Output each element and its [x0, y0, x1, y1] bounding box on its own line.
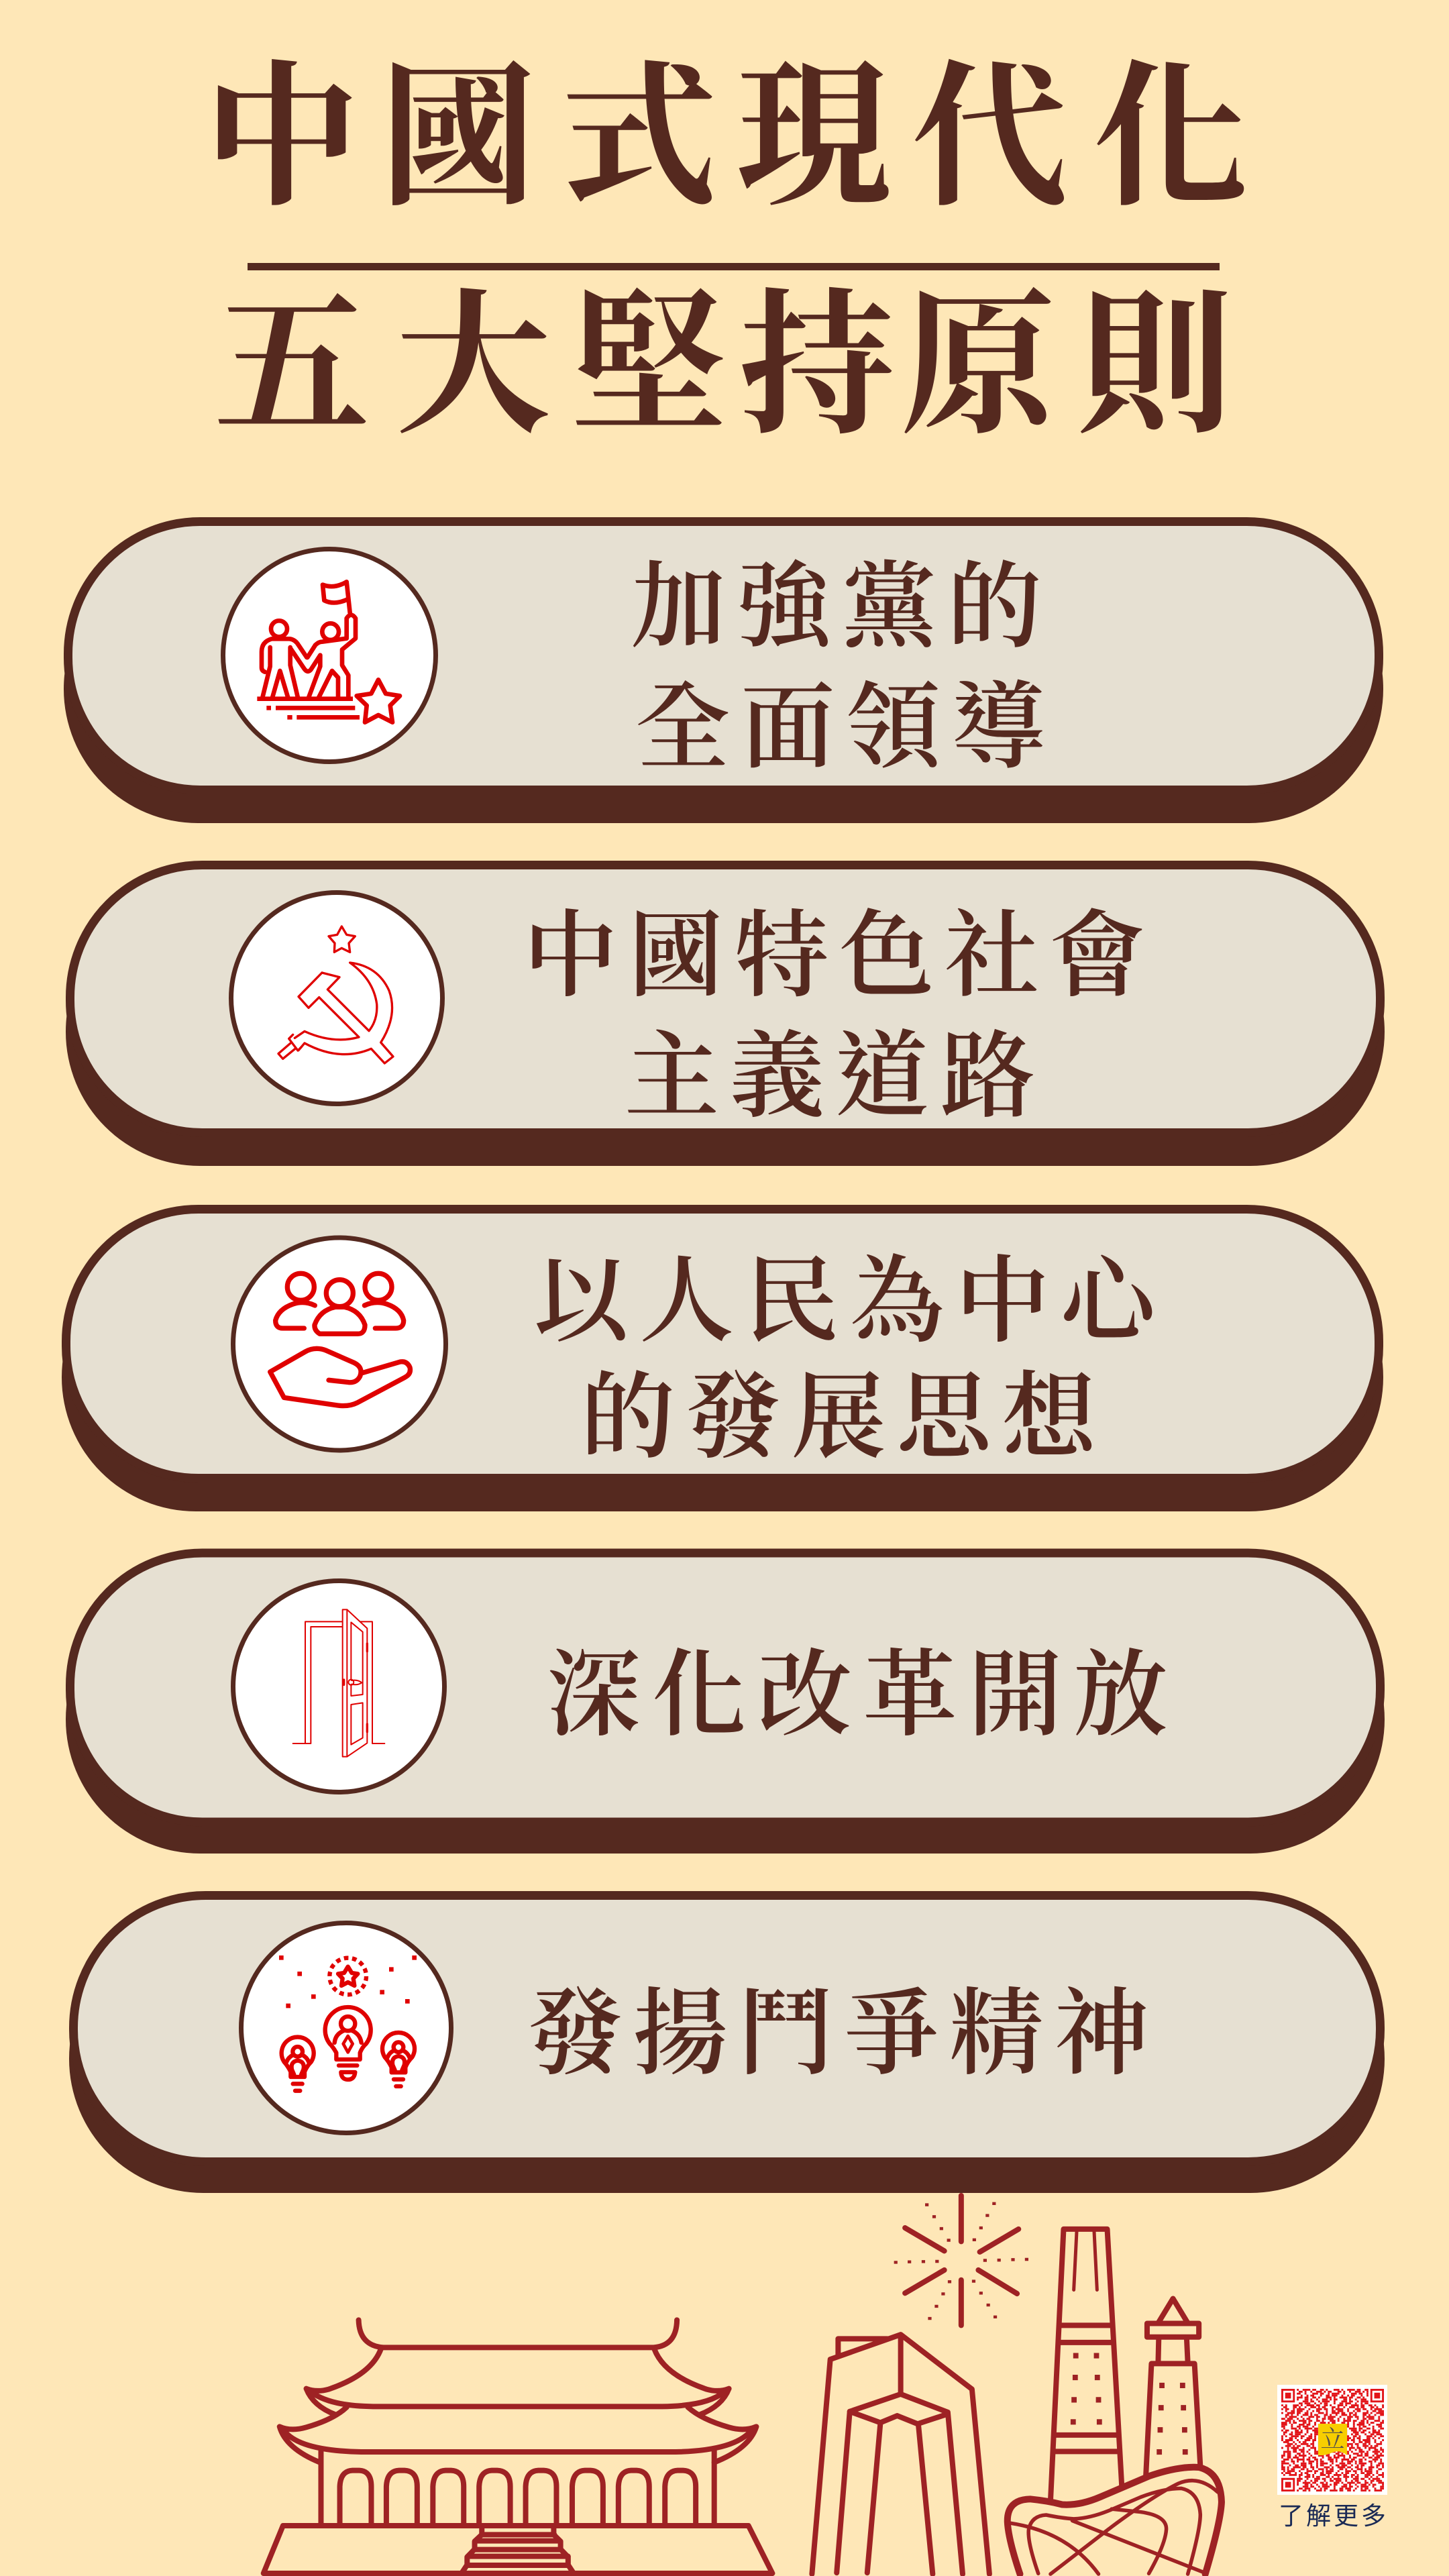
panel: principle 5	[69, 1896, 1385, 2193]
icon: people in hand	[233, 1238, 445, 1450]
panel: principle 2	[66, 865, 1385, 1166]
building: small tower	[1146, 2298, 1200, 2475]
text: principle 2: 中國特色社會	[523, 904, 1144, 1009]
QR caption: 了解更多	[1279, 2502, 1389, 2530]
panel: principle 3	[62, 1209, 1383, 1511]
panel: principle 1	[64, 522, 1383, 823]
text: principle 3: 以人民為中心	[534, 1250, 1163, 1354]
logo: 立	[1320, 2426, 1345, 2453]
text: principle 1	[631, 555, 1046, 781]
text: principle 5: 發揚鬥爭精神	[528, 1982, 1149, 2087]
building: tall tower	[1051, 2229, 1122, 2501]
building: stadium	[1008, 2467, 1222, 2574]
title divider	[248, 263, 1220, 270]
text: principle 2	[523, 904, 1144, 1130]
heading: line two: 五大堅持原則	[214, 281, 1233, 453]
illustration: palace	[264, 2320, 772, 2573]
text: principle 3: 的發展思想	[580, 1366, 1099, 1470]
heading: line one: 中國式現代化	[204, 53, 1248, 225]
text: principle 3	[534, 1250, 1163, 1470]
text: principle 1: 加強黨的	[631, 555, 1042, 660]
building: headquarters tower	[812, 2334, 989, 2574]
text: principle 4: 深化改革開放	[547, 1644, 1168, 1748]
text: principle 2: 主義道路	[625, 1025, 1035, 1130]
panel: principle 4	[66, 1553, 1385, 1854]
title	[204, 53, 1248, 453]
QR code block	[1277, 2385, 1387, 2495]
illustration: skyscrapers	[812, 2229, 1222, 2574]
icon: light bulbs with star	[241, 1923, 451, 2133]
text: principle 1: 全面領導	[635, 676, 1046, 781]
icon: hammer and sickle	[231, 892, 443, 1104]
icon: open door	[233, 1580, 444, 1792]
illustration: firework	[894, 2196, 1028, 2325]
icon: leaders with flag	[223, 549, 436, 762]
